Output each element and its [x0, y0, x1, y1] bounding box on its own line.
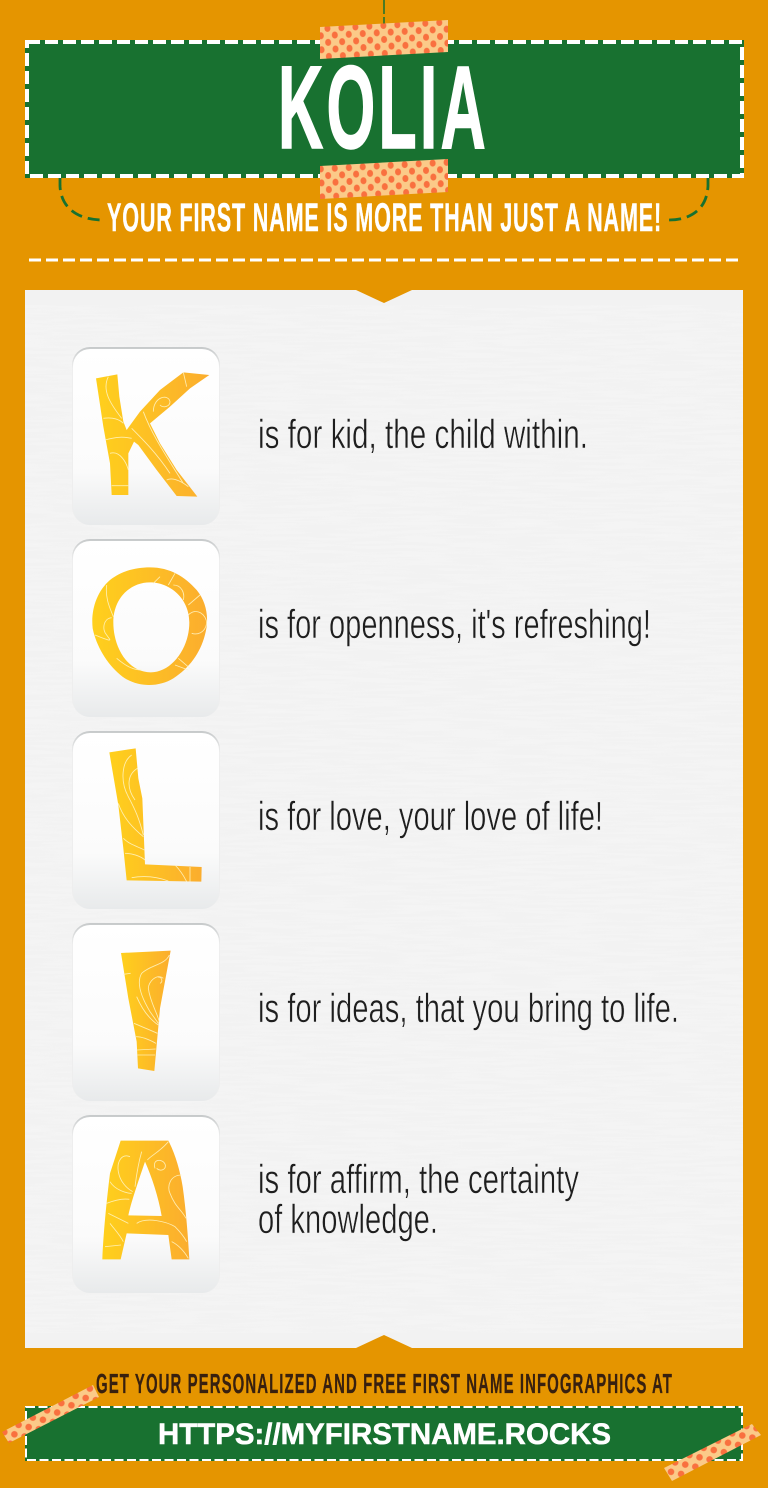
text: A: is for affirm, the certainty — [258, 1156, 579, 1202]
text: A — [258, 1156, 579, 1242]
text: K: is for kid, the child within. — [258, 411, 588, 457]
tape: top — [320, 20, 448, 59]
tile: L — [72, 731, 220, 909]
title banner — [25, 40, 744, 178]
tile: O — [72, 539, 220, 717]
letter L — [109, 748, 202, 882]
footer url: HTTPS://MYFIRSTNAME.ROCKS — [158, 1418, 611, 1451]
tape: footer right — [664, 1424, 761, 1481]
hanging thread — [383, 0, 385, 24]
letter K — [96, 372, 209, 497]
letter A — [102, 1141, 189, 1259]
connector: left — [60, 178, 103, 220]
panel: letters — [25, 290, 743, 1348]
tile: I — [72, 923, 220, 1101]
footer banner — [25, 1406, 743, 1461]
text: A: of knowledge. — [258, 1196, 438, 1242]
tape: bottom — [320, 159, 448, 199]
letter I — [121, 951, 171, 1071]
title: KOLIA — [278, 42, 489, 174]
letter O — [92, 567, 207, 685]
tile: A — [72, 1115, 220, 1293]
tape: footer left — [2, 1385, 99, 1443]
text: L: is for love, your love of life! — [258, 793, 603, 839]
connector: right — [669, 178, 708, 220]
tile: K — [72, 347, 220, 525]
